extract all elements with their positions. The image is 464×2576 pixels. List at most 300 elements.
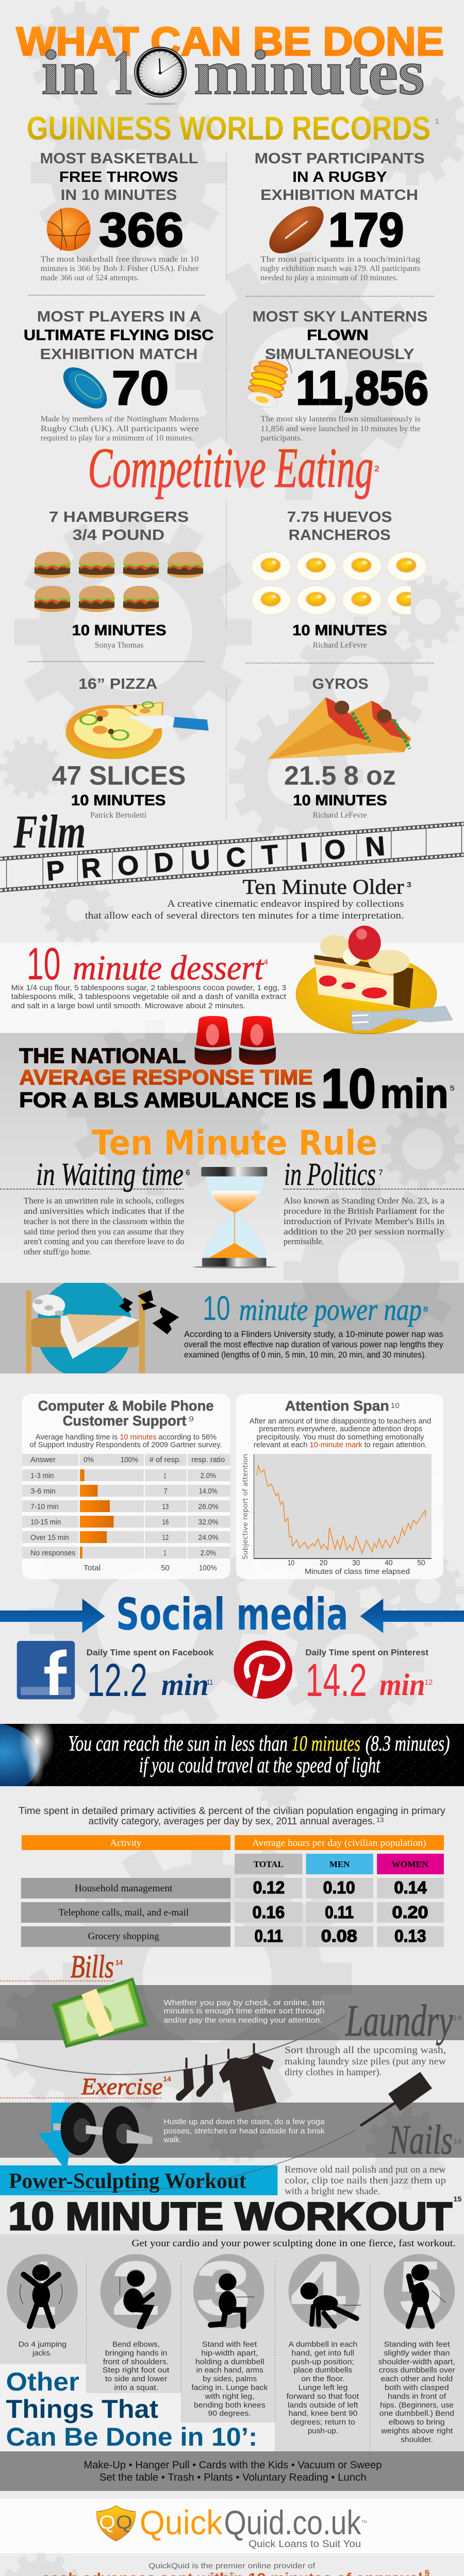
- heading: competitive eating: 2: [374, 464, 379, 473]
- panel: 16 inch pizza: [52, 676, 209, 820]
- panel: rule in waiting time: in Waiting time: [36, 1157, 184, 1192]
- panel: attention span: presenters everywhere, audience attention drops: [259, 1425, 422, 1433]
- step 5: cross dumbbells: one dumbbell.) Bend: [379, 2409, 454, 2418]
- panel: workout steps: Get your cardio and your power sculpting done in one fierce, fast workout.: [131, 2238, 456, 2249]
- panel: gyros: 21.5 8 oz: [284, 760, 396, 790]
- heading: nails: Nails: [389, 2117, 453, 2163]
- panel: rule in waiting time: teacher is not there in the classroom within the: [24, 1216, 185, 1226]
- text block: bills: Whether you pay by check, or online, ten: [163, 1998, 325, 2007]
- icon: pinterest: [234, 1640, 292, 1699]
- line chart: attention over class time: 20: [320, 1558, 328, 1567]
- panel: attention span: After an amount of time disappointing to teachers and: [250, 1417, 432, 1426]
- panel: rugby exhibition match: MOST PARTICIPANTS: [255, 150, 425, 167]
- logo: quickquid: Q: [99, 2512, 115, 2533]
- panel: customer support: Average handling time is 10 minutes according to 56%: [36, 1433, 217, 1442]
- panel: hamburgers: 3/4 POUND: [73, 527, 164, 544]
- panel: gyros: Richard LeFevre: [313, 810, 367, 820]
- panel: attention span: [236, 1394, 443, 1579]
- step 5: cross dumbbells: [378, 2245, 455, 2444]
- panel: basketball free throws: FREE THROWS: [59, 169, 178, 185]
- film strip: production: T: [260, 839, 279, 871]
- text block: time spent intro: activity category, averages per day by sex, 2011 annual averages.: [89, 1816, 375, 1827]
- text block: ten minute older: [85, 875, 411, 921]
- panel: rule in waiting time: [0, 1157, 190, 1257]
- step 5: cross dumbbells: weights above right: [380, 2427, 453, 2435]
- table: time use averages: Telephone calls, mail, and e-mail: [59, 1907, 189, 1918]
- text block: laundry: Sort through all the upcoming wash,: [285, 2045, 446, 2056]
- panel: rule in politics: procedure in the British Parliament for the: [284, 1206, 444, 1216]
- step 2: squat: to side and lower: [105, 2375, 167, 2383]
- step 4: push-up: forward so that foot: [287, 2392, 359, 2401]
- panel: rule in waiting time: and universities which indicates that if the: [24, 1206, 185, 1216]
- step 2: squat: Step right foot out: [103, 2366, 170, 2375]
- band: power nap: According to a Flinders University study, a 10-minute power nap was: [184, 1329, 443, 1339]
- icon: facebook: [17, 1641, 75, 1699]
- panel: sky lanterns: FLOWN: [307, 327, 369, 344]
- divider lines: [226, 153, 227, 820]
- band: power nap: 8: [423, 1305, 428, 1314]
- panel: sky lanterns: 11,856 and were launched in 10 minutes by the: [261, 423, 421, 433]
- heading: ten minute rule: Ten Minute Rule: [92, 1123, 377, 1163]
- panel: basketball free throws: 366: [99, 204, 184, 257]
- step 5: cross dumbbells: 5: [398, 2245, 442, 2331]
- logo: quickquid: Quid.co.uk: [224, 2504, 361, 2542]
- table: time use averages: Average hours per day (civilian population): [252, 1838, 426, 1849]
- text block: time spent intro: 13: [376, 1817, 384, 1824]
- band: speed of light: 10 minutes: [291, 1732, 360, 1756]
- table: time use averages: 0.12: [253, 1878, 285, 1897]
- table: handling times: 12: [162, 1533, 169, 1542]
- text block: national average response time: [19, 1044, 455, 1120]
- text block: quickquid description: QuickQuid is the premier online provider of: [148, 2562, 316, 2570]
- step 3: lunge: bending both knees: [194, 2401, 266, 2410]
- band: speed of light: if you could travel at the speed of light: [139, 1753, 381, 1777]
- panel: rule in politics: introduction of Private Member's Bills in: [284, 1216, 444, 1226]
- heading: 10 minute workout: 15: [453, 2196, 462, 2204]
- panel: 10 minute dessert: 10: [27, 939, 61, 990]
- table: time use averages: 0.14: [394, 1878, 427, 1897]
- illustration: laundry line with clothes: [0, 2015, 346, 2112]
- panel: basketball free throws: The most basketball free throws made in 10: [41, 254, 199, 264]
- panel: sky lanterns: participants.: [261, 433, 303, 443]
- panel: ultimate flying disc: Made by members of the Nottingham Moderns: [41, 414, 199, 423]
- table: time use averages: Grocery shopping: [88, 1931, 159, 1942]
- title: [16, 19, 444, 108]
- text block: ten minute older: 3: [407, 880, 411, 889]
- panel: attention span: Attention Span: [285, 1397, 389, 1414]
- icon: money: [52, 1977, 148, 2048]
- table: handling times: 0%: [84, 1455, 94, 1464]
- panel: rule in politics: permissible.: [284, 1236, 324, 1246]
- line chart: attention over class time: 30: [352, 1558, 360, 1567]
- heading: laundry: 14: [453, 2014, 462, 2022]
- panel: sky lanterns: MOST SKY LANTERNS: [253, 309, 427, 325]
- step 1: jumping jacks: 1: [29, 2245, 56, 2331]
- panel: rule in politics: 7: [379, 1167, 383, 1177]
- panel: 16 inch pizza: 10 MINUTES: [71, 792, 165, 809]
- text block: exercise: Hustle up and down the stairs, do a few yoga: [163, 2117, 325, 2126]
- film strip: production: C: [225, 842, 247, 873]
- text block: laundry: making laundry size piles (put any new: [285, 2056, 446, 2067]
- panel: rugby exhibition match: IN A RUGBY: [292, 169, 387, 185]
- step 4: push-up: hand, knee bent 90: [289, 2409, 358, 2418]
- line chart: attention over class time: 10: [288, 1558, 294, 1567]
- band: other things list: Set the table • Trash • Plants • Voluntary Reading • Lunch: [100, 2472, 367, 2483]
- table: time use averages: 0.11: [255, 1927, 283, 1945]
- panel: 10 minute dessert: Mix 1/4 cup flour, 5 tablespoons sugar, 2 tablespoons cocoa powder, 1 egg, 3: [11, 984, 286, 992]
- panel: rule in waiting time: 6: [186, 1167, 190, 1177]
- heading: guinness world records: GUINNESS WORLD RECORDS: [27, 111, 430, 147]
- step 5: cross dumbbells: slightly wider than: [384, 2349, 450, 2358]
- step 5: cross dumbbells: elbows to bring: [389, 2418, 445, 2427]
- icon: burgers: [34, 552, 204, 612]
- table: handling times: 2.0%: [201, 1471, 216, 1480]
- band: speed of light: You can reach the sun in less than: [68, 1732, 288, 1756]
- table: handling times: 1-3 min: [30, 1471, 54, 1480]
- panel: facebook: Daily Time spent on Facebook: [87, 1647, 214, 1657]
- title: in: [41, 38, 97, 108]
- banner: power sculpting workout: [0, 2165, 277, 2195]
- heading: bills: 14: [115, 1959, 123, 1967]
- panel: sky lanterns: SIMULTANEOUSLY: [265, 346, 415, 363]
- text block: national average response time: min: [380, 1071, 449, 1116]
- panel: huevos rancheros: RANCHEROS: [289, 527, 391, 544]
- panel: attention span: precipitously. You must do something emotionally: [257, 1433, 425, 1442]
- table: handling times: 32.0%: [198, 1518, 219, 1527]
- text block: ten minute older: Ten Minute Older: [243, 875, 404, 899]
- text block: national average response time: FOR A BLS AMBULANCE IS: [19, 1089, 316, 1112]
- panel: rule in waiting time: There is an unwritten rule in schools, colleges: [24, 1196, 185, 1206]
- heading: competitive eating: Competitive Eating: [88, 437, 373, 500]
- panel: ultimate flying disc: Rugby Club (UK). All participants were: [41, 423, 199, 433]
- line chart: attention over class time: [241, 1454, 432, 1576]
- text block: ten minute older: that allow each of several directors ten minutes for a time interpretation.: [85, 910, 404, 921]
- panel: ultimate flying disc: MOST PLAYERS IN A: [37, 309, 201, 325]
- step 2: squat: bringing hands in: [105, 2349, 167, 2358]
- heading: exercise: Exercise: [81, 2074, 163, 2100]
- panel: ultimate flying disc: [24, 309, 213, 443]
- table: handling times: 10-15 min: [30, 1518, 61, 1527]
- heading: laundry: Laundry: [345, 1996, 453, 2046]
- heading: 10 minute workout: [8, 2195, 462, 2239]
- heading: guinness world records: [27, 111, 439, 147]
- panel: customer support: Customer Support: [63, 1412, 187, 1429]
- step 2: squat: [101, 2245, 171, 2392]
- step 3: lunge: 90 degrees.: [208, 2409, 251, 2418]
- step 4: push-up: [287, 2245, 361, 2435]
- table: handling times: 1: [163, 1549, 167, 1557]
- text block: bills: and/or pay the ones needing your attention.: [163, 2016, 322, 2025]
- step 4: push-up: degrees; return to: [291, 2418, 355, 2427]
- band: power nap: [0, 1279, 464, 1378]
- step 3: lunge: with right leg,: [204, 2392, 255, 2401]
- text block: exercise: posses, stretches or head outside for a brisk: [163, 2127, 325, 2136]
- panel: rule in waiting time: other stuff/go home.: [24, 1247, 92, 1257]
- step 3: lunge: in each hand, arms: [196, 2366, 263, 2375]
- icon: cake: [296, 926, 437, 1034]
- heading: 10 minute workout: 10 MINUTE WORKOUT: [8, 2195, 452, 2239]
- panel: basketball free throws: made 366 out of 524 attempts.: [41, 273, 139, 282]
- heading: nails: 14: [453, 2138, 462, 2146]
- step 3: lunge: hip-width apart,: [201, 2349, 258, 2358]
- panel: hamburgers: Sonya Thomas: [95, 640, 143, 650]
- step 4: push-up: Lunge left leg: [299, 2383, 348, 2392]
- panel: basketball free throws: IN 10 MINUTES: [61, 187, 177, 204]
- panel: pinterest: [234, 1640, 433, 1706]
- film strip: production: [0, 822, 464, 892]
- step 5: cross dumbbells: both with clasped: [385, 2383, 449, 2392]
- heading: social media with arrows: Social media: [116, 1588, 349, 1640]
- text block: time spent intro: [19, 1806, 445, 1827]
- step 5: cross dumbbells: hips. (Beginners, use: [380, 2401, 454, 2410]
- panel: facebook: min: [161, 1667, 209, 1702]
- logo: quickquid: Quick: [140, 2504, 223, 2542]
- film strip: production: U: [189, 844, 211, 876]
- table: time use averages: Activity: [110, 1838, 142, 1849]
- panel: rugby exhibition match: [255, 150, 425, 282]
- band: speed of light: (8.3 minutes): [366, 1732, 450, 1756]
- heading: nails: [389, 2117, 462, 2163]
- text block: time spent intro: Time spent in detailed primary activities & percent of the civilian population engaging in primary: [19, 1806, 445, 1817]
- panel: sky lanterns: [244, 309, 428, 443]
- panel: 16 inch pizza: 16” PIZZA: [78, 676, 157, 692]
- logo: quickquid: Q: [116, 2512, 132, 2533]
- line chart: attention over class time: Minutes of class time elapsed: [305, 1567, 410, 1576]
- panel: 10 minute dessert: 4: [263, 958, 268, 967]
- panel: rugby exhibition match: The most participants in a touch/mini/tag: [260, 254, 421, 264]
- heading: bills: [0, 1949, 123, 1984]
- panel: basketball free throws: [40, 150, 200, 282]
- panel: rugby exhibition match: EXHIBITION MATCH: [260, 187, 418, 204]
- heading: social media with arrows: [0, 1588, 464, 1640]
- title: 1: [112, 38, 133, 108]
- text block: national average response time: 5: [450, 1084, 455, 1093]
- panel: rule in politics: in Politics: [284, 1157, 376, 1192]
- step 5: cross dumbbells: shoulder-width apart,: [378, 2358, 455, 2366]
- step 4: push-up: push-up.: [308, 2427, 338, 2435]
- icon: sleeping bed: [26, 1279, 179, 1378]
- panel: 10 minute dessert: and salt in a large bowl until smooth. Microwave about 2 minutes.: [11, 1002, 245, 1010]
- film strip: production: D: [153, 847, 175, 878]
- panel: pinterest: Daily Time spent on Pinterest: [305, 1647, 429, 1657]
- table: handling times: 16: [162, 1518, 169, 1527]
- table: handling times: # of resp.: [150, 1455, 181, 1464]
- nail line curve: [29, 2129, 357, 2192]
- film strip: production: N: [364, 831, 386, 862]
- panel: rule in waiting time: aren't coming and you can therefore leave to do: [24, 1236, 185, 1246]
- table: handling times: 24.0%: [198, 1533, 219, 1542]
- panel: basketball free throws: MOST BASKETBALL: [40, 150, 198, 167]
- table: handling times: 50: [161, 1564, 170, 1572]
- panel: ultimate flying disc: ULTIMATE FLYING DISC: [24, 327, 213, 344]
- panel: customer support: [22, 1394, 230, 1579]
- step 2: squat: 2: [111, 2245, 161, 2331]
- heading: exercise: 14: [163, 2076, 172, 2083]
- table: handling times: 26.0%: [198, 1502, 219, 1511]
- line chart: attention over class time: 50: [417, 1558, 425, 1567]
- banner: power sculpting workout: Power-Sculpting Workout: [9, 2169, 246, 2193]
- band: other things list: [0, 2451, 464, 2491]
- table: handling times: Answer: [30, 1455, 56, 1464]
- panel: facebook: 11: [207, 1678, 213, 1687]
- panel: rugby exhibition match: rugby exhibition match was 179. All participants: [260, 263, 420, 273]
- text block: national average response time: THE NATIONAL: [19, 1044, 186, 1068]
- icon: fork: [351, 1006, 453, 1030]
- table: time use averages: [21, 1835, 444, 1947]
- panel: other things heading: Things That: [6, 2395, 159, 2424]
- table: handling times: 3-6 min: [30, 1487, 56, 1496]
- text block: laundry: [285, 2045, 446, 2078]
- table: time use averages: 0.16: [253, 1903, 285, 1922]
- table: handling times: 14.0%: [199, 1487, 218, 1496]
- logo: quickquid: TM: [361, 2520, 367, 2524]
- panel: pinterest: 14.2: [305, 1654, 367, 1706]
- step 5: cross dumbbells: cross dumbbells over: [379, 2366, 455, 2375]
- panel: huevos rancheros: 7.75 HUEVOS: [287, 509, 392, 526]
- heading: exercise: [0, 2074, 172, 2100]
- table: handling times: 1: [163, 1471, 167, 1480]
- panel: other things heading: Can Be Done in 10’:: [6, 2422, 257, 2451]
- band: power nap: minute power nap: [239, 1292, 422, 1327]
- text block: nails: color, clip toe nails then jazz them up: [285, 2175, 446, 2186]
- step 1: jumping jacks: [7, 2245, 78, 2358]
- heading: guinness world records: 1: [435, 118, 439, 126]
- step 3: lunge: 3: [195, 2245, 252, 2331]
- panel: workout steps: [0, 2234, 464, 2451]
- icon: dumbbell: [38, 2103, 153, 2165]
- panel: ultimate flying disc: 70: [112, 362, 169, 415]
- step 5: cross dumbbells: hands in front of: [388, 2392, 446, 2401]
- table: handling times: Total: [84, 1564, 101, 1572]
- step 4: push-up: on the floor.: [301, 2375, 345, 2383]
- band: power nap: overall the most effective nap duration of various power nap lengths they: [184, 1339, 443, 1349]
- panel: hamburgers: 7 HAMBURGERS: [49, 509, 189, 526]
- line chart: attention over class time: Subjective report of attention: [241, 1454, 250, 1560]
- text block: bills: minutes is enough time either sort through: [163, 2007, 325, 2015]
- panel: rule in politics: addition to the 20 per session normally: [284, 1227, 444, 1236]
- panel: attention span: relevant at each 10-minute mark to regain attention.: [254, 1440, 427, 1449]
- icon: earth: [0, 1724, 54, 1786]
- panel: gyros: GYROS: [312, 676, 369, 692]
- table: handling times: 2.0%: [201, 1549, 216, 1557]
- panel: rugby exhibition match: 179: [328, 204, 404, 257]
- step 4: push-up: lands outside of left: [288, 2401, 358, 2410]
- panel: 10 minute dessert: [0, 926, 464, 1034]
- table: handling times: [22, 1454, 230, 1572]
- step 2: squat: into a squat.: [114, 2383, 158, 2392]
- panel: gyros: [268, 676, 411, 820]
- panel: 10 minute dessert: minute dessert: [73, 948, 264, 987]
- panel: 16 inch pizza: 47 SLICES: [52, 760, 186, 790]
- table: handling times: 7-10 min: [30, 1502, 59, 1511]
- panel: facebook: 12.2: [87, 1654, 147, 1706]
- table: handling times: 100%: [199, 1564, 217, 1572]
- film strip: production: O: [323, 834, 346, 866]
- panel: facebook: [17, 1641, 214, 1706]
- step 4: push-up: hand, get into full: [291, 2349, 354, 2358]
- panel: ultimate flying disc: required to play for a minimum of 10 minutes.: [41, 433, 194, 443]
- icon: pizza: [65, 702, 209, 759]
- panel: attention span: 10: [391, 1401, 400, 1410]
- table: handling times: 100%: [121, 1455, 138, 1464]
- table: handling times: No responses: [30, 1549, 75, 1557]
- step 3: lunge: holding a dumbbell: [195, 2358, 264, 2366]
- text block: exercise: walk.: [163, 2136, 181, 2144]
- panel: customer support: 9: [189, 1415, 194, 1423]
- text block: laundry: dirty clothes in hamper).: [285, 2067, 382, 2078]
- table: handling times: 7: [163, 1487, 168, 1496]
- logo: quickquid: Quick Loans to Suit You: [248, 2539, 361, 2550]
- band: speed of light: [0, 1724, 464, 1786]
- text block: nails: with a bright new shade.: [285, 2186, 380, 2197]
- step 1: jumping jacks: Do 4 jumping: [19, 2340, 67, 2349]
- table: handling times: resp. ratio: [191, 1455, 225, 1464]
- text block: national average response time: 10: [321, 1057, 376, 1120]
- table: time use averages: TOTAL: [254, 1859, 284, 1869]
- table: handling times: 13: [162, 1502, 169, 1511]
- step 3: lunge: [191, 2245, 269, 2418]
- panel: customer support: Computer & Mobile Phone: [38, 1397, 213, 1414]
- text block: exercise: [163, 2117, 325, 2144]
- logo: quickquid: [0, 2499, 464, 2553]
- title: WHAT CAN BE DONE: [16, 19, 444, 64]
- heading: film: Film: [13, 806, 86, 858]
- step 4: push-up: place dumbbells: [293, 2366, 352, 2375]
- table: handling times: Over 15 min: [30, 1533, 69, 1542]
- table: time use averages: MEN: [329, 1859, 350, 1869]
- film strip: production: P: [45, 855, 66, 887]
- band: power nap: examined (lengths of 0 min, 5 min, 10 min, 20 min, and 30 minutes).: [184, 1349, 427, 1360]
- icon: fried eggs: [252, 552, 426, 615]
- panel: sky lanterns: The most sky lanterns flown simultaneously is: [261, 414, 421, 423]
- panel: hamburgers: 10 MINUTES: [72, 622, 167, 639]
- icon: clock: [134, 47, 187, 105]
- table: time use averages: 0.08: [321, 1927, 357, 1945]
- table: time use averages: 0.10: [323, 1878, 355, 1897]
- panel: other things heading: [0, 2364, 275, 2451]
- panel: pinterest: min: [379, 1667, 425, 1702]
- text block: bills: [163, 1998, 325, 2025]
- band: ambulance background: [0, 1033, 464, 1255]
- step 1: jumping jacks: jacks.: [32, 2349, 52, 2358]
- panel: rugby exhibition match: needed to play a minimum of 10 minutes.: [260, 273, 398, 282]
- text block: quickquid description: [41, 2562, 430, 2576]
- table: time use averages: 0.20: [392, 1903, 428, 1922]
- text block: nails: [285, 2164, 446, 2197]
- panel: hamburgers: [34, 509, 204, 650]
- table: time use averages: Household management: [75, 1883, 173, 1894]
- step 3: lunge: Stand with feet: [202, 2340, 257, 2349]
- heading: bills: Bills: [71, 1949, 114, 1984]
- step 2: squat: Bend elbows,: [112, 2340, 160, 2349]
- film strip: production: I: [299, 837, 309, 868]
- text block: nails: Remove old nail polish and put on a new: [285, 2164, 446, 2175]
- table: time use averages: 0.13: [394, 1927, 426, 1945]
- table: time use averages: 0.11: [325, 1903, 354, 1922]
- panel: customer support: of Support Industry Respondents of 2009 Gartner survey.: [29, 1440, 222, 1449]
- text block: ten minute older: A creative cinematic endeavor inspired by collections: [167, 899, 404, 909]
- step 3: lunge: by sides, palms: [203, 2375, 257, 2383]
- panel: huevos rancheros: [252, 509, 426, 650]
- title: minutes: [194, 38, 425, 108]
- panel: rule in politics: [284, 1157, 464, 1246]
- film strip: production: R: [80, 853, 102, 884]
- icon: ambulance sirens: [195, 1016, 276, 1065]
- icon: gyros: [268, 697, 411, 759]
- step 5: cross dumbbells: Standing with feet: [384, 2340, 450, 2349]
- step 3: lunge: facing in. Lunge back: [191, 2383, 269, 2392]
- panel: ultimate flying disc: EXHIBITION MATCH: [40, 346, 197, 363]
